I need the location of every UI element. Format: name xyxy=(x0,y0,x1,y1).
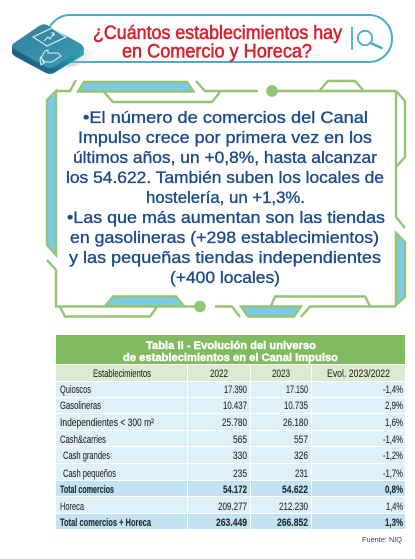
icon: isometric tile with chart and thumb xyxy=(12,24,96,74)
row: Horeca: 212.230 xyxy=(279,501,308,513)
row: Gasolineras: 2,9% xyxy=(385,400,403,412)
row: Total comercios xyxy=(56,481,405,496)
table xyxy=(56,335,405,529)
text block: second bullet: en gasolineras (+298 establecimientos) xyxy=(70,228,379,247)
row: Cash grandes: Cash grandes xyxy=(63,450,110,462)
text block: second bullet: •Las que más aumentan son las tiendas xyxy=(67,208,385,227)
row: Cash pequeños: 235 xyxy=(233,468,247,480)
row: Gasolineras xyxy=(56,398,405,413)
row: Cash&carries xyxy=(56,431,405,446)
row: Quioscos: 17.390 xyxy=(224,384,247,396)
row: Cash grandes: 326 xyxy=(294,450,308,462)
row: Quioscos: Quioscos xyxy=(60,384,91,396)
text block: first bullet: •El número de comercios del Canal xyxy=(83,108,368,127)
frame: bottom edge xyxy=(55,296,396,317)
row: Total comercios: Total comercios xyxy=(60,484,114,496)
row: Cash grandes: 330 xyxy=(233,450,247,462)
row: Horeca xyxy=(56,497,405,513)
row: Cash&carries: -1,4% xyxy=(383,434,403,446)
row: Cash pequeños: Cash pequeños xyxy=(63,468,116,480)
text block: first bullet: los 54.622. También suben los locales de xyxy=(66,168,384,187)
row: Independientes: 26.180 xyxy=(283,417,308,429)
frame: left edge xyxy=(47,91,56,306)
row: Total comercios: 0,8% xyxy=(385,484,403,496)
title: ¿Cuántos establecimientos hay xyxy=(93,22,342,44)
text block: second bullet: y las pequeñas tiendas independientes xyxy=(69,248,381,267)
frame: right edge xyxy=(396,91,405,305)
title xyxy=(93,22,342,62)
text block: first bullet xyxy=(66,108,384,207)
header search bar xyxy=(47,15,392,62)
table header row: Establecimientos xyxy=(93,368,151,380)
row: Cash pequeños xyxy=(56,464,405,480)
row: Quioscos xyxy=(56,382,405,397)
row: Cash grandes xyxy=(56,447,405,463)
row: Cash&carries: 565 xyxy=(233,434,247,446)
row: Horeca: 209.277 xyxy=(218,501,247,513)
row: Independientes: 1,6% xyxy=(385,417,403,429)
row: Total comercios: 54.622 xyxy=(282,484,308,496)
text block: second bullet xyxy=(67,208,385,287)
row: Total comercios + Horeca: 1,3% xyxy=(385,517,403,529)
title: en Comercio y Horeca? xyxy=(122,40,312,62)
row: Total comercios: 54.172 xyxy=(223,484,247,496)
text block: first bullet: hostelería, un +1,3%. xyxy=(146,188,305,207)
table header row: Evol. 2023/2022 xyxy=(327,368,390,380)
row: Total comercios + Horeca: Total comercios + Horeca xyxy=(60,517,152,529)
row: Total comercios + Horeca: 263.449 xyxy=(216,517,247,529)
table header row: 2023 xyxy=(272,368,290,380)
row: Independientes: Independientes < 300 m² xyxy=(60,417,154,429)
row: Cash pequeños: -1,7% xyxy=(383,468,403,480)
row: Gasolineras: Gasolineras xyxy=(60,400,101,412)
row: Horeca: 1,4% xyxy=(386,501,403,513)
row: Cash grandes: -1,2% xyxy=(383,450,403,462)
row: Gasolineras: 10.735 xyxy=(284,400,308,412)
table title xyxy=(56,335,405,364)
table title: Tabla II - Evolución del universo xyxy=(146,340,316,352)
source note: Fuente: NIQ xyxy=(362,535,402,544)
row: Cash pequeños: 231 xyxy=(295,468,308,480)
row: Quioscos: 17.150 xyxy=(286,384,308,396)
text block: first bullet: Impulso crece por primera vez en los xyxy=(78,128,372,147)
row: Horeca: Horeca xyxy=(60,501,85,513)
table header row: 2022 xyxy=(210,368,228,380)
icon: magnifying glass xyxy=(352,27,382,50)
row: Total comercios + Horeca xyxy=(56,514,405,529)
text block: second bullet: (+400 locales) xyxy=(170,268,280,287)
row: Cash&carries: 557 xyxy=(294,434,308,446)
row: Total comercios + Horeca: 266.852 xyxy=(277,517,308,529)
frame: top edge xyxy=(56,80,396,102)
row: Independientes: 25.780 xyxy=(222,417,247,429)
row: Independientes xyxy=(56,414,405,430)
row: Cash&carries: Cash&carries xyxy=(60,434,106,446)
row: Quioscos: -1,4% xyxy=(383,384,403,396)
table title: de establecimientos en el Canal Impulso xyxy=(123,352,338,364)
row: Gasolineras: 10.437 xyxy=(223,400,247,412)
table header row xyxy=(56,365,405,381)
panel: text frame xyxy=(47,80,405,317)
text block: first bullet: últimos años, un +0,8%, hasta alcanzar xyxy=(73,148,377,167)
